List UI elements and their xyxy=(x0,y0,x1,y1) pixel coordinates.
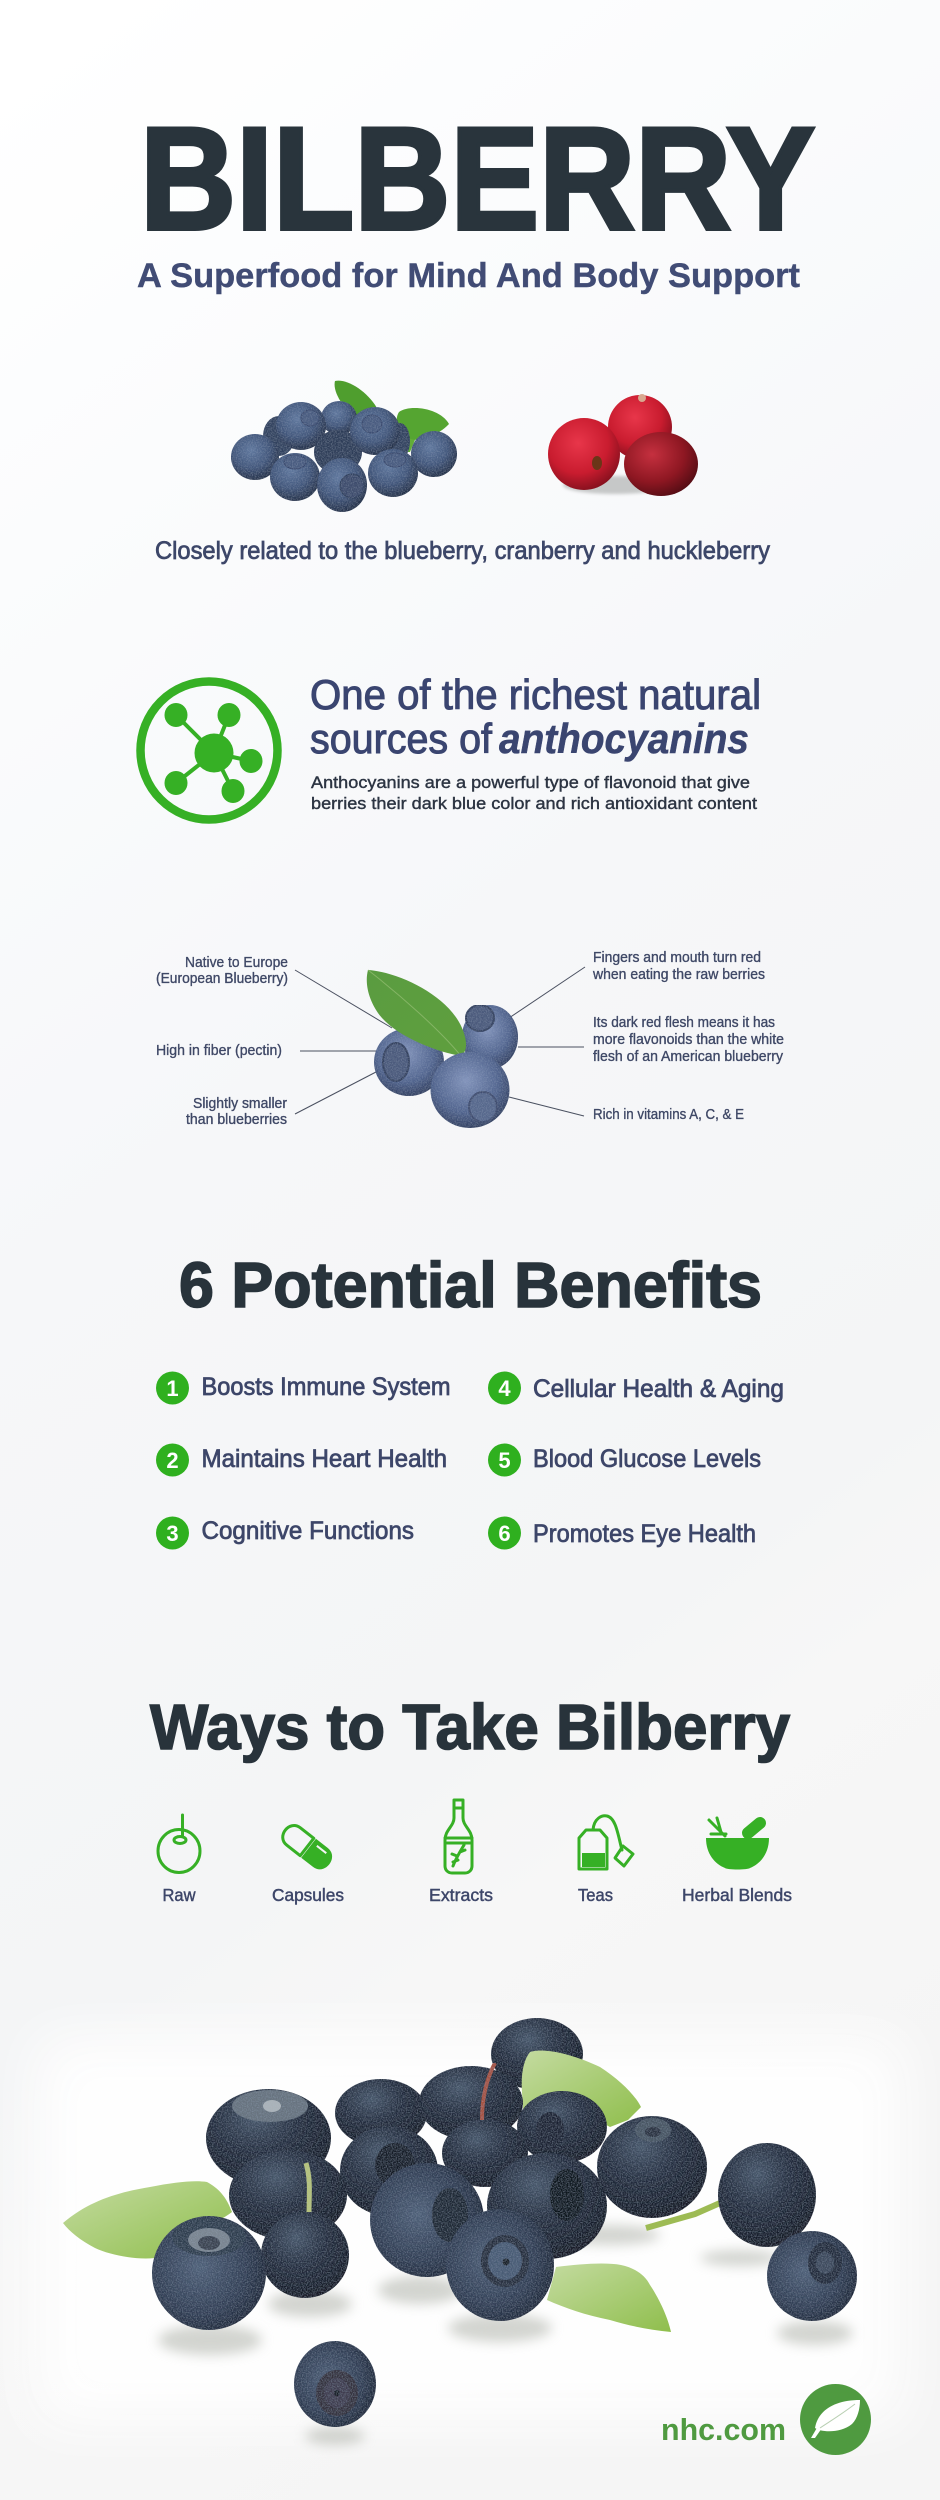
leaf: left xyxy=(63,2181,232,2258)
labels: right callouts: flesh of an American blueberry xyxy=(593,1048,783,1065)
labels: left callouts: (European Blueberry) xyxy=(156,970,288,987)
benefit 4: 4 xyxy=(498,1376,511,1401)
berry: far right low xyxy=(767,2231,857,2321)
berry shadows xyxy=(158,2225,853,2445)
labels: right callouts xyxy=(592,949,784,1123)
labels: right callouts: Rich in vitamins A, C, & E xyxy=(593,1106,744,1123)
berry: big left xyxy=(152,2216,266,2330)
benefit 2: Maintains Heart Health xyxy=(202,1445,447,1473)
way: herbal blends: Herbal Blends xyxy=(682,1885,792,1905)
panel: 6 potential benefits xyxy=(156,1249,784,1550)
benefit 2 xyxy=(156,1444,447,1476)
berry: small front left xyxy=(261,2212,349,2298)
labels: left callouts: than blueberries xyxy=(186,1111,287,1128)
panel: ways to take bilberry xyxy=(150,1691,792,1905)
benefit 1 xyxy=(156,1372,450,1404)
benefit 1: 1 xyxy=(166,1376,179,1401)
image: bilberry pile xyxy=(63,2018,857,2445)
berry: far right xyxy=(718,2143,816,2247)
benefit 5: 5 xyxy=(498,1448,511,1473)
benefit 1: Boosts Immune System xyxy=(202,1373,450,1401)
text: anthocyanins description xyxy=(311,773,757,813)
heading: richest sources: anthocyanins xyxy=(499,715,749,762)
way: extracts: Extracts xyxy=(429,1885,493,1905)
benefit 6 xyxy=(488,1516,756,1550)
stem: far right berry xyxy=(646,2203,720,2228)
leaf: bottom xyxy=(547,2264,671,2332)
benefit 5 xyxy=(488,1444,761,1476)
benefit 3: Cognitive Functions xyxy=(202,1517,414,1545)
benefit 6: 6 xyxy=(498,1521,511,1546)
benefit 3 xyxy=(156,1516,414,1550)
labels: right callouts: more flavonoids than the white xyxy=(593,1031,784,1048)
way: herbal blends xyxy=(682,1818,792,1905)
labels: right callouts: when eating the raw berries xyxy=(592,966,765,983)
panel: bottom bilberry photo xyxy=(40,2018,900,2445)
leaf: top right xyxy=(522,2050,641,2127)
labels: left callouts: High in fiber (pectin) xyxy=(156,1042,282,1059)
berry cluster back row xyxy=(206,2063,707,2240)
benefit 3: 3 xyxy=(166,1521,179,1546)
logo: nhc.com: nhc.com xyxy=(661,2412,786,2447)
way: teas: Teas xyxy=(578,1885,613,1905)
labels: left callouts: Slightly smaller xyxy=(193,1095,287,1112)
callout lines xyxy=(295,967,585,1116)
labels: left callouts: Native to Europe xyxy=(185,954,288,971)
icon: molecule xyxy=(140,682,278,820)
benefit 2: 2 xyxy=(166,1448,179,1473)
heading: richest sources: sources of xyxy=(310,715,492,762)
logo: nhc.com xyxy=(661,2384,871,2455)
title: BILBERRY xyxy=(140,97,815,260)
labels: right callouts: Fingers and mouth turn red xyxy=(593,949,761,966)
benefit 6: Promotes Eye Health xyxy=(533,1520,756,1548)
heading: richest sources xyxy=(310,671,761,762)
way: capsules: Capsules xyxy=(272,1885,344,1905)
berry: bottom single xyxy=(294,2341,376,2427)
text: anthocyanins description: berries their dark blue color and rich antioxidant content xyxy=(311,794,757,813)
way: capsules xyxy=(272,1821,344,1905)
benefit 5: Blood Glucose Levels xyxy=(533,1445,761,1473)
text: anthocyanins description: Anthocyanins are a powerful type of flavonoid that give xyxy=(311,773,750,792)
photo backdrop xyxy=(40,2040,900,2420)
subtitle: A Superfood for Mind And Body Support xyxy=(137,257,800,295)
way: teas xyxy=(578,1816,633,1905)
labels: right callouts: Its dark red flesh means it has xyxy=(593,1014,775,1031)
caption: related berries: Closely related to the blueberry, cranberry and huckleberry xyxy=(155,537,770,565)
way: raw: Raw xyxy=(162,1885,196,1905)
labels: left callouts xyxy=(156,954,288,1128)
way: raw xyxy=(158,1815,200,1905)
berry: front center xyxy=(446,2209,554,2321)
heading: ways: Ways to Take Bilberry xyxy=(150,1691,790,1763)
panel: anthocyanins xyxy=(140,671,761,820)
image: cranberries xyxy=(548,394,698,496)
heading: benefits: 6 Potential Benefits xyxy=(179,1249,762,1321)
panel: bilberry facts diagram xyxy=(156,949,784,1128)
image: bilberries with leaf xyxy=(367,970,518,1128)
panel: related berries xyxy=(155,381,770,565)
heading: richest sources: One of the richest natural xyxy=(310,671,761,718)
image: blueberry cluster xyxy=(231,381,457,512)
berry cluster front row xyxy=(370,2153,607,2277)
berry: top back xyxy=(491,2018,583,2090)
benefit 4: Cellular Health & Aging xyxy=(533,1375,784,1403)
way: extracts xyxy=(429,1800,493,1905)
